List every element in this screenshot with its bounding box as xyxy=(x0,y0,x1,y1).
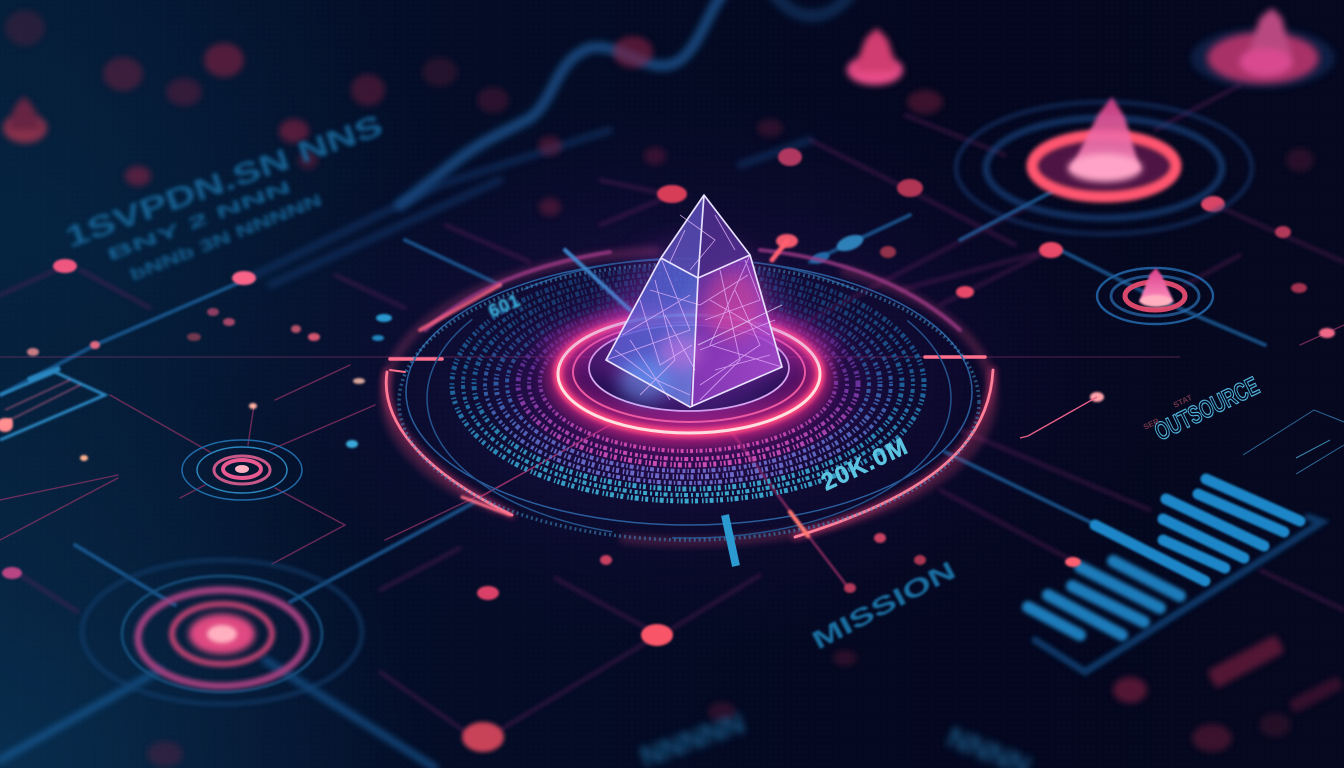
foreground blurred nodes xyxy=(462,722,504,752)
bright node dots xyxy=(0,148,1335,646)
left circuit panel xyxy=(0,368,105,440)
blurred label: top left heading: 1SVPDN.SN NNS xyxy=(61,109,387,255)
concentric data text rings xyxy=(452,267,924,501)
central radial pink spokes xyxy=(462,241,808,566)
readout: 601: 601 xyxy=(485,290,524,322)
blurred label: top left heading: BNY 2 NNN xyxy=(105,177,293,265)
data label: OUTSOURCE: OUTSOURCE xyxy=(1150,371,1264,446)
bar chart xyxy=(1028,479,1322,672)
top right cone: large target xyxy=(956,97,1252,234)
central target dial xyxy=(385,250,993,542)
blurred label: top left heading xyxy=(61,109,387,285)
central magenta glow xyxy=(485,273,895,497)
inner blue guide rings xyxy=(406,259,972,525)
small wireframe panel xyxy=(1243,410,1344,474)
small right target xyxy=(1097,268,1213,324)
small left target xyxy=(182,440,302,500)
blurred label: bottom center: MISSION xyxy=(808,556,960,655)
blurred label: bottom edge xyxy=(636,707,1035,768)
data label: OUTSOURCE: SER xyxy=(1142,416,1161,432)
outer pink ring xyxy=(385,250,993,542)
left blurred cone xyxy=(3,96,47,143)
glowing pink core ring xyxy=(539,308,839,433)
data label: OUTSOURCE: STAT xyxy=(1172,393,1194,410)
bottom left target xyxy=(82,560,362,704)
top middle cone xyxy=(847,28,903,85)
blurred label: top left heading: bNNb 3N NNNNN xyxy=(127,190,325,285)
pink link with node xyxy=(1020,397,1097,438)
blurred line chart at top xyxy=(400,0,850,205)
top right blurred cone xyxy=(1191,8,1335,88)
readout: 20K.0M: 20K.0M xyxy=(817,433,913,496)
dial readouts xyxy=(485,290,913,496)
crystal pyramid xyxy=(605,195,785,415)
